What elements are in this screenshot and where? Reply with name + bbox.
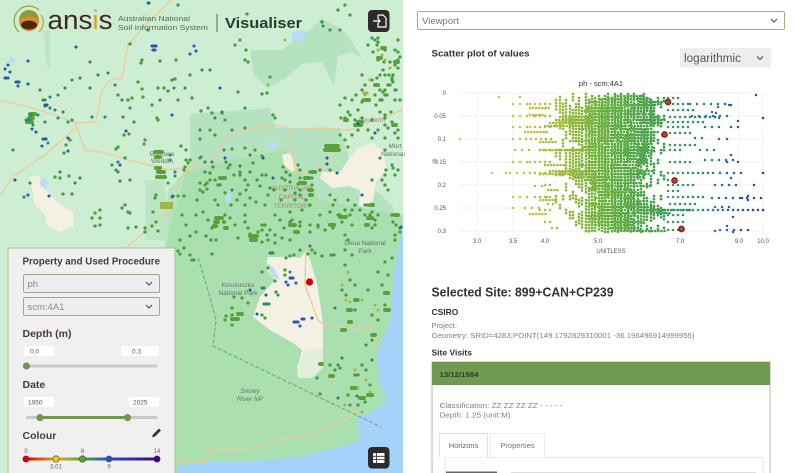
site details: Project: <box>432 321 457 330</box>
soil site dots: dense green clusters <box>27 48 398 398</box>
icon: export button <box>368 10 390 32</box>
map labels: Deua National <box>344 240 386 247</box>
highlighted selected points <box>662 100 684 232</box>
map labels <box>150 117 405 403</box>
site details: Geometry: SRID=4283;POINT(149.1792829310001 -36.196496914999955) <box>432 331 695 340</box>
properties tab <box>490 434 544 458</box>
map labels: Kosciuszko <box>222 282 255 289</box>
state border <box>198 258 381 427</box>
map labels: National Park <box>218 290 258 297</box>
road shield <box>160 202 173 209</box>
colour legend: 6 <box>81 449 85 455</box>
scale select: logarithmic <box>684 53 741 65</box>
depth inputs <box>24 346 159 356</box>
map labels: AUSTRALIAN <box>272 185 313 192</box>
map labels: River NP <box>237 396 264 403</box>
heading: site visits: Site Visits <box>432 348 472 358</box>
heading: property and used procedure: Property and Used Procedure <box>22 256 160 268</box>
depth inputs: 0.0 <box>30 348 39 356</box>
horizon table top <box>446 472 497 473</box>
scatter points: dense rows <box>525 96 690 231</box>
procedure select: scm:4A1 <box>28 302 64 313</box>
map labels: TERRITORY <box>273 203 311 210</box>
horizons tab <box>440 434 488 458</box>
y axis labels: 0.15 <box>434 160 447 166</box>
colour legend: 9 <box>107 464 111 470</box>
procedure select <box>24 298 160 316</box>
icon: pencil <box>152 428 161 438</box>
x axis labels: 3.0 <box>473 239 482 245</box>
classification text: Classification: ZZ ZZ ZZ ZZ - - - - - <box>440 401 563 410</box>
y axis labels: 0.25 <box>434 206 447 212</box>
scatter points: sparse outer <box>510 104 762 230</box>
logo wordmark: ansis <box>48 5 112 35</box>
site visit card: 13/12/1984 <box>440 370 479 379</box>
y axis labels: 0.05 <box>434 114 447 120</box>
lakes <box>9 30 306 280</box>
colour legend: 0 <box>24 449 28 455</box>
x axis labels: 3.5 <box>509 239 518 245</box>
date inputs: 2025 <box>133 400 148 406</box>
y axis labels: 0.1 <box>438 137 447 143</box>
map labels: CAPITAL <box>279 194 306 201</box>
x axis labels: 10.0 <box>757 239 769 245</box>
x axis labels <box>473 239 769 245</box>
map labels: Weddin <box>151 158 173 165</box>
viewport select <box>418 12 784 30</box>
date inputs <box>24 397 159 407</box>
heading: selected site: Selected Site: 899+CAN+CP239 <box>432 286 614 300</box>
viewport select: Viewport <box>422 16 460 26</box>
selected site marker <box>306 278 313 286</box>
x axis labels: 5.0 <box>594 239 603 245</box>
map labels: National <box>381 151 405 158</box>
map labels: Goulburn <box>359 117 386 124</box>
card header <box>432 362 770 385</box>
app title: Visualiser <box>225 15 302 32</box>
y axis labels <box>434 91 447 235</box>
tab content border <box>445 458 763 473</box>
scatter points: dense columns <box>556 94 664 232</box>
heading: depth: Depth (m) <box>22 328 72 340</box>
panel: property controls <box>8 248 175 473</box>
horizons tab: Horizons <box>449 441 479 450</box>
chart grid <box>459 93 764 234</box>
classification text <box>440 401 563 420</box>
map labels: Mort <box>388 143 402 150</box>
y axis labels: 0.3 <box>438 229 447 235</box>
scatter points: mid spread rows <box>526 98 768 230</box>
ocean <box>177 225 403 473</box>
depth inputs: 0.3 <box>132 348 141 356</box>
soil site dots: green <box>55 3 400 405</box>
panel: map <box>0 0 405 473</box>
logo <box>14 5 302 35</box>
heading: organisation: CSIRO <box>432 307 459 317</box>
scatter chart <box>432 79 769 255</box>
logo: Soil Information System <box>118 25 208 32</box>
heading: date: Date <box>22 379 45 391</box>
x axis labels: 4.0 <box>541 239 550 245</box>
chart title: ph - scm:4A1 <box>579 79 623 88</box>
classification text: Depth: 1.25 (unit:M) <box>440 410 511 420</box>
y axis labels: 0.2 <box>438 183 447 189</box>
y axis labels: 0 <box>443 91 447 97</box>
soil site dots: teal <box>13 22 372 398</box>
depth slider <box>23 362 157 370</box>
x axis title: UNITLESS <box>596 249 626 255</box>
heading: scatter plot: Scatter plot of values <box>432 48 530 60</box>
site visit card <box>432 362 770 473</box>
y axis title: m <box>432 158 438 165</box>
colour legend: 14 <box>154 449 161 455</box>
date inputs: 1950 <box>28 400 43 406</box>
property select <box>24 274 160 292</box>
scatter points: outliers <box>460 95 763 232</box>
icon: list button <box>368 447 390 468</box>
panel: right side <box>418 12 784 473</box>
soil site dots: olive <box>268 40 390 412</box>
x axis labels: 7.0 <box>676 239 685 245</box>
soil site dots: blue <box>5 3 401 326</box>
heading: colour: Colour <box>22 430 56 442</box>
roads <box>0 0 403 463</box>
map parks and regions <box>43 18 403 473</box>
map labels: Snowy <box>240 388 261 395</box>
colour legend: 3.01 <box>50 464 62 470</box>
logo icon <box>14 6 43 32</box>
map labels: Park <box>358 248 372 255</box>
properties tab: Properties <box>500 441 535 450</box>
sand areas <box>30 143 386 368</box>
map labels: Burrowa <box>150 151 174 158</box>
colour legend <box>23 449 161 470</box>
date slider <box>26 414 157 421</box>
x axis labels: 9.0 <box>735 239 744 245</box>
logo subtitle: Australian National <box>118 16 191 23</box>
site details <box>432 321 695 340</box>
scale select <box>680 48 771 68</box>
pale southern sand <box>297 347 323 378</box>
property select: ph <box>28 279 38 290</box>
